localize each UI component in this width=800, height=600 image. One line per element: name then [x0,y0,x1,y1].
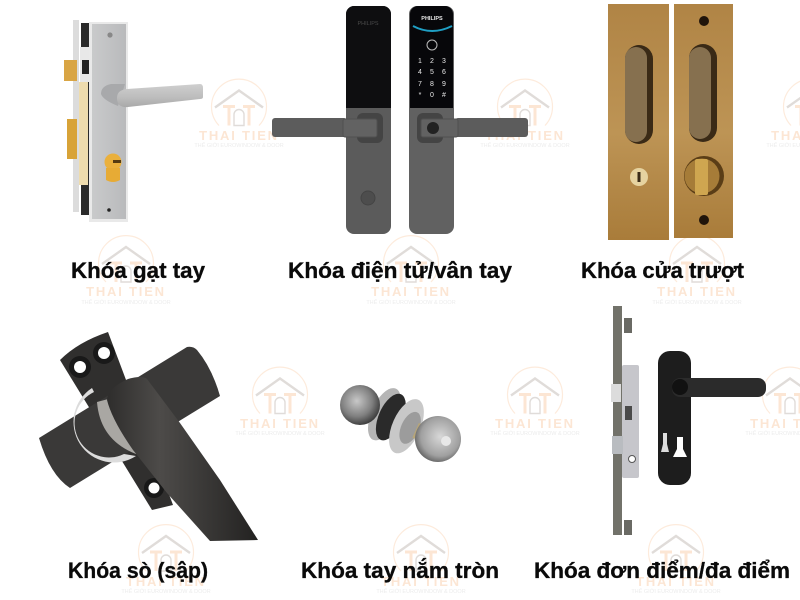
watermark logo row 4 middle [376,525,466,595]
watermark logo row 4 left: THẾ GIỚI EUROWINDOW & DOOR [121,588,211,595]
watermark logo row 4 left [121,525,211,595]
watermark logo row 2 middle: THAI TIEN [371,284,451,299]
watermark logo row 2 middle: THẾ GIỚI EUROWINDOW & DOOR [366,299,456,306]
front plate with keypad: 1 [418,58,422,65]
front plate with keypad: 5 [430,69,434,76]
watermark logo row 3 left: THAI TIEN [240,416,320,431]
watermark logo row 3 right [745,367,800,437]
watermark logo row 2 left [81,236,171,306]
image: sliding door lock [608,4,733,240]
watermark logo row 1 left: THẾ GIỚI EUROWINDOW & DOOR [194,142,284,149]
image: lever handle lock [64,20,203,222]
watermark logo row 4 middle: THẾ GIỚI EUROWINDOW & DOOR [376,588,466,595]
label: single/multipoint lock: Khóa đơn điểm/đa điểm [534,558,790,583]
watermark logo row 2 right: THAI TIEN [657,284,737,299]
watermark logo row 4 middle: THAI TIEN [381,574,461,589]
watermark logo row 2 right [652,236,742,306]
front plate with keypad: 4 [418,69,422,76]
front plate with keypad: PHILIPS [421,16,443,22]
back plate: PHILIPS [357,21,379,27]
watermark logo row 3 left: THẾ GIỚI EUROWINDOW & DOOR [235,430,325,437]
watermark logo row 2 right: THẾ GIỚI EUROWINDOW & DOOR [652,299,742,306]
image: multipoint lock [611,306,766,535]
watermark logo row 1 middle [480,79,570,149]
label: knob lock: Khóa tay nắm tròn [301,558,499,583]
image: cylindrical knob lock [340,381,461,462]
watermark logo row 4 right [631,525,721,595]
label: electronic lock: Khóa điện tử/vân tay [288,258,513,283]
mortise lock body [611,306,639,535]
front plate with keypad: # [442,92,446,99]
back plate [272,6,391,234]
watermark logo row 3 middle: THAI TIEN [495,416,575,431]
front plate with keypad [409,6,528,234]
image: casement window lock [39,332,258,541]
watermark logo row 1 left [194,79,284,149]
watermark logo row 3 middle [490,367,580,437]
watermark logo row 1 right [766,79,800,149]
label: lever lock: Khóa gạt tay [71,258,206,283]
watermark logo row 3 left [235,367,325,437]
watermark logo row 1 middle: THẾ GIỚI EUROWINDOW & DOOR [480,142,570,149]
front plate with keypad: 2 [430,58,434,65]
front plate with keypad: 9 [442,81,446,88]
label: casement lock: Khóa sò (sập) [68,558,208,583]
black handle [658,351,766,485]
watermark logo row 2 left: THẾ GIỚI EUROWINDOW & DOOR [81,299,171,306]
left brass plate [608,4,669,240]
watermark logo row 4 right: THAI TIEN [636,574,716,589]
front plate with keypad: 6 [442,69,446,76]
front plate with keypad: 7 [418,81,422,88]
image: electronic fingerprint lock [272,6,528,234]
watermark logo row 2 middle [366,236,456,306]
front plate with keypad: 0 [430,92,434,99]
right brass plate [674,4,733,238]
front plate with keypad: * [419,92,422,99]
label: sliding door lock: Khóa cửa trượt [581,258,745,283]
front plate with keypad: 3 [442,58,446,65]
front plate with keypad: 8 [430,81,434,88]
watermark logo row 2 left: THAI TIEN [86,284,166,299]
watermark logo row 3 middle: THẾ GIỚI EUROWINDOW & DOOR [490,430,580,437]
watermark logo row 4 left: THAI TIEN [126,574,206,589]
watermark logo row 4 right: THẾ GIỚI EUROWINDOW & DOOR [631,588,721,595]
watermark logo row 1 middle: THAI TIEN [485,128,565,143]
watermark logo row 1 left: THAI TIEN [199,128,279,143]
